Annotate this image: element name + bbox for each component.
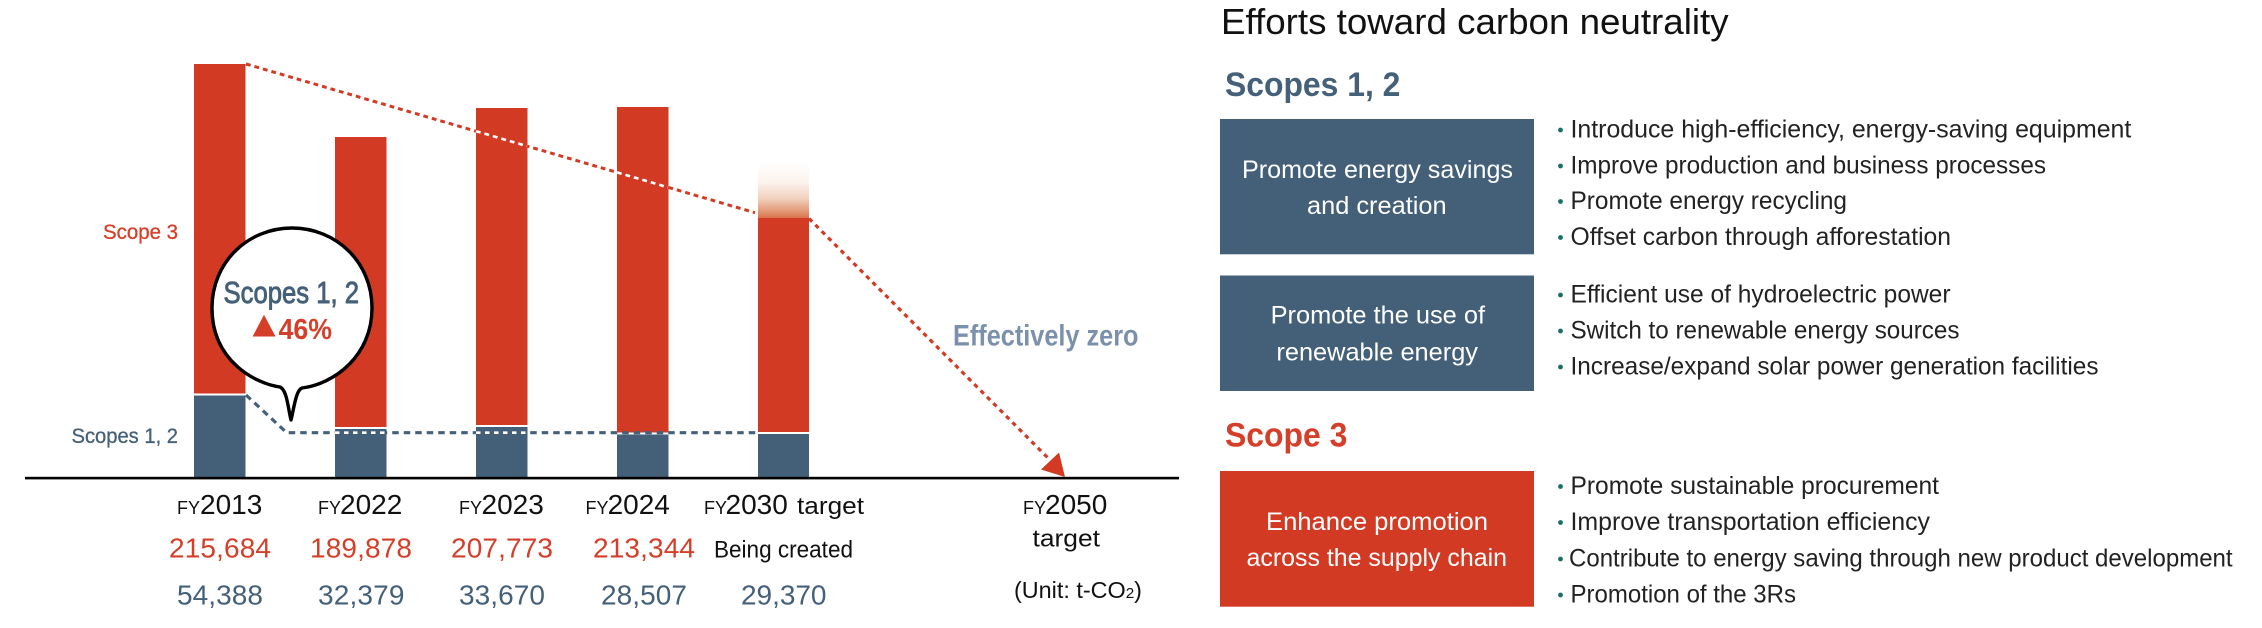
panel: enhance promotion across the supply chain: Enhance promotion bbox=[1266, 508, 1488, 536]
panel: promote energy savings and creation: Promote energy savings bbox=[1242, 156, 1513, 184]
panel: promote energy savings and creation bbox=[1220, 119, 1534, 254]
data column: FY2023: FY bbox=[459, 498, 482, 518]
data column: FY2024: FY bbox=[586, 498, 609, 518]
panel: enhance promotion across the supply chain bbox=[1220, 471, 1534, 607]
callout: Scopes 1, 2 down 46%: 46% bbox=[279, 314, 332, 346]
list: energy savings actions: Promote energy recycling bbox=[1570, 187, 1847, 215]
list: supply chain actions: Improve transportation efficiency bbox=[1570, 508, 1930, 536]
data column: FY2050 target: target bbox=[1032, 526, 1100, 553]
panel: promote the use of renewable energy: Promote the use of bbox=[1271, 302, 1485, 330]
data column: FY2050 target: 2050 bbox=[1045, 489, 1107, 520]
data column: FY2013 bbox=[169, 489, 271, 610]
data column: FY2050 target: FY bbox=[1023, 498, 1046, 518]
list: renewable energy actions: Switch to renewable energy sources bbox=[1570, 316, 1960, 344]
list: renewable energy actions bbox=[1558, 280, 2098, 380]
bar: FY2013 bbox=[194, 64, 246, 478]
panel: promote energy savings and creation: and creation bbox=[1307, 192, 1447, 220]
data column: FY2022: 2022 bbox=[340, 489, 402, 520]
data column: FY2030 target: FY bbox=[704, 498, 727, 518]
bar: FY2022 bbox=[335, 137, 386, 478]
data column: FY2030 target: 2030 bbox=[726, 489, 788, 520]
data column: FY2023: 2023 bbox=[482, 489, 544, 520]
data column: FY2030 target bbox=[704, 489, 864, 610]
panel: enhance promotion across the supply chain: across the supply chain bbox=[1246, 544, 1507, 572]
panel: promote the use of renewable energy bbox=[1220, 276, 1534, 391]
list: renewable energy actions: Increase/expand solar power generation facilities bbox=[1570, 352, 2098, 380]
x axis baseline bbox=[25, 477, 1179, 479]
data column: FY2022: FY bbox=[318, 498, 341, 518]
data column: FY2022: 189,878 bbox=[310, 532, 412, 564]
data column: FY2022: 32,379 bbox=[318, 579, 404, 610]
bar chart: emissions by fiscal year bbox=[25, 64, 1179, 479]
data column: FY2013: FY bbox=[177, 498, 200, 518]
arrow: decline to effectively zero by FY2050 bbox=[809, 218, 1065, 477]
data column: FY2030 target: target bbox=[797, 493, 864, 520]
list: renewable energy actions: Efficient use of hydroelectric power bbox=[1570, 280, 1950, 308]
bar: FY2023 bbox=[476, 108, 528, 478]
heading: Scope 3: Scope 3 bbox=[1225, 416, 1347, 454]
data column: FY2024 bbox=[586, 489, 695, 610]
callout: Scopes 1, 2 down 46%: Scopes 1, 2 bbox=[224, 275, 359, 310]
line: Scopes 1, 2 target trend bbox=[246, 395, 757, 433]
data column: FY2023: 33,670 bbox=[459, 579, 545, 610]
bar: FY2030 target bbox=[758, 163, 809, 478]
list: energy savings actions: Improve production and business processes bbox=[1570, 151, 2046, 179]
list: energy savings actions bbox=[1558, 115, 2131, 251]
data column: FY2013: 215,684 bbox=[169, 532, 271, 564]
axis label: Scope 3: Scope 3 bbox=[103, 221, 178, 244]
data column: FY2024: 2024 bbox=[608, 489, 670, 520]
list: energy savings actions: Offset carbon through afforestation bbox=[1570, 223, 1951, 251]
data column: FY2030 target: Being created bbox=[714, 536, 853, 564]
bar: FY2024 bbox=[617, 107, 668, 478]
axis label: Scopes 1, 2: Scopes 1, 2 bbox=[72, 425, 178, 448]
data column: FY2024: 213,344 bbox=[593, 532, 695, 564]
data column: FY2030 target: 29,370 bbox=[741, 579, 826, 610]
list: supply chain actions: Promotion of the 3Rs bbox=[1570, 581, 1796, 609]
heading: Scopes 1, 2: Scopes 1, 2 bbox=[1225, 66, 1400, 104]
data column: FY2023: 207,773 bbox=[451, 532, 553, 564]
data column: FY2050 target bbox=[1023, 489, 1107, 553]
data column: FY2023 bbox=[451, 489, 553, 610]
data column: FY2013: 54,388 bbox=[177, 579, 263, 610]
title: Efforts toward carbon neutrality bbox=[1221, 1, 1729, 42]
list: supply chain actions: Promote sustainable procurement bbox=[1570, 472, 1939, 500]
list: supply chain actions bbox=[1558, 472, 2233, 609]
arrow: Scope 3 reduction trend to FY2030 bbox=[246, 64, 755, 213]
label: Effectively zero: Effectively zero bbox=[953, 320, 1138, 353]
list: supply chain actions: Contribute to energy saving through new product development bbox=[1569, 545, 2233, 573]
data column: FY2022 bbox=[310, 489, 412, 610]
panel: promote the use of renewable energy: renewable energy bbox=[1276, 338, 1478, 366]
data column: FY2013: 2013 bbox=[200, 489, 262, 520]
callout: Scopes 1, 2 down 46% bbox=[212, 228, 372, 420]
data column: FY2024: 28,507 bbox=[601, 579, 687, 610]
unit note: (Unit: t-CO2) bbox=[1014, 577, 1142, 603]
list: energy savings actions: Introduce high-efficiency, energy-saving equipment bbox=[1570, 115, 2131, 143]
